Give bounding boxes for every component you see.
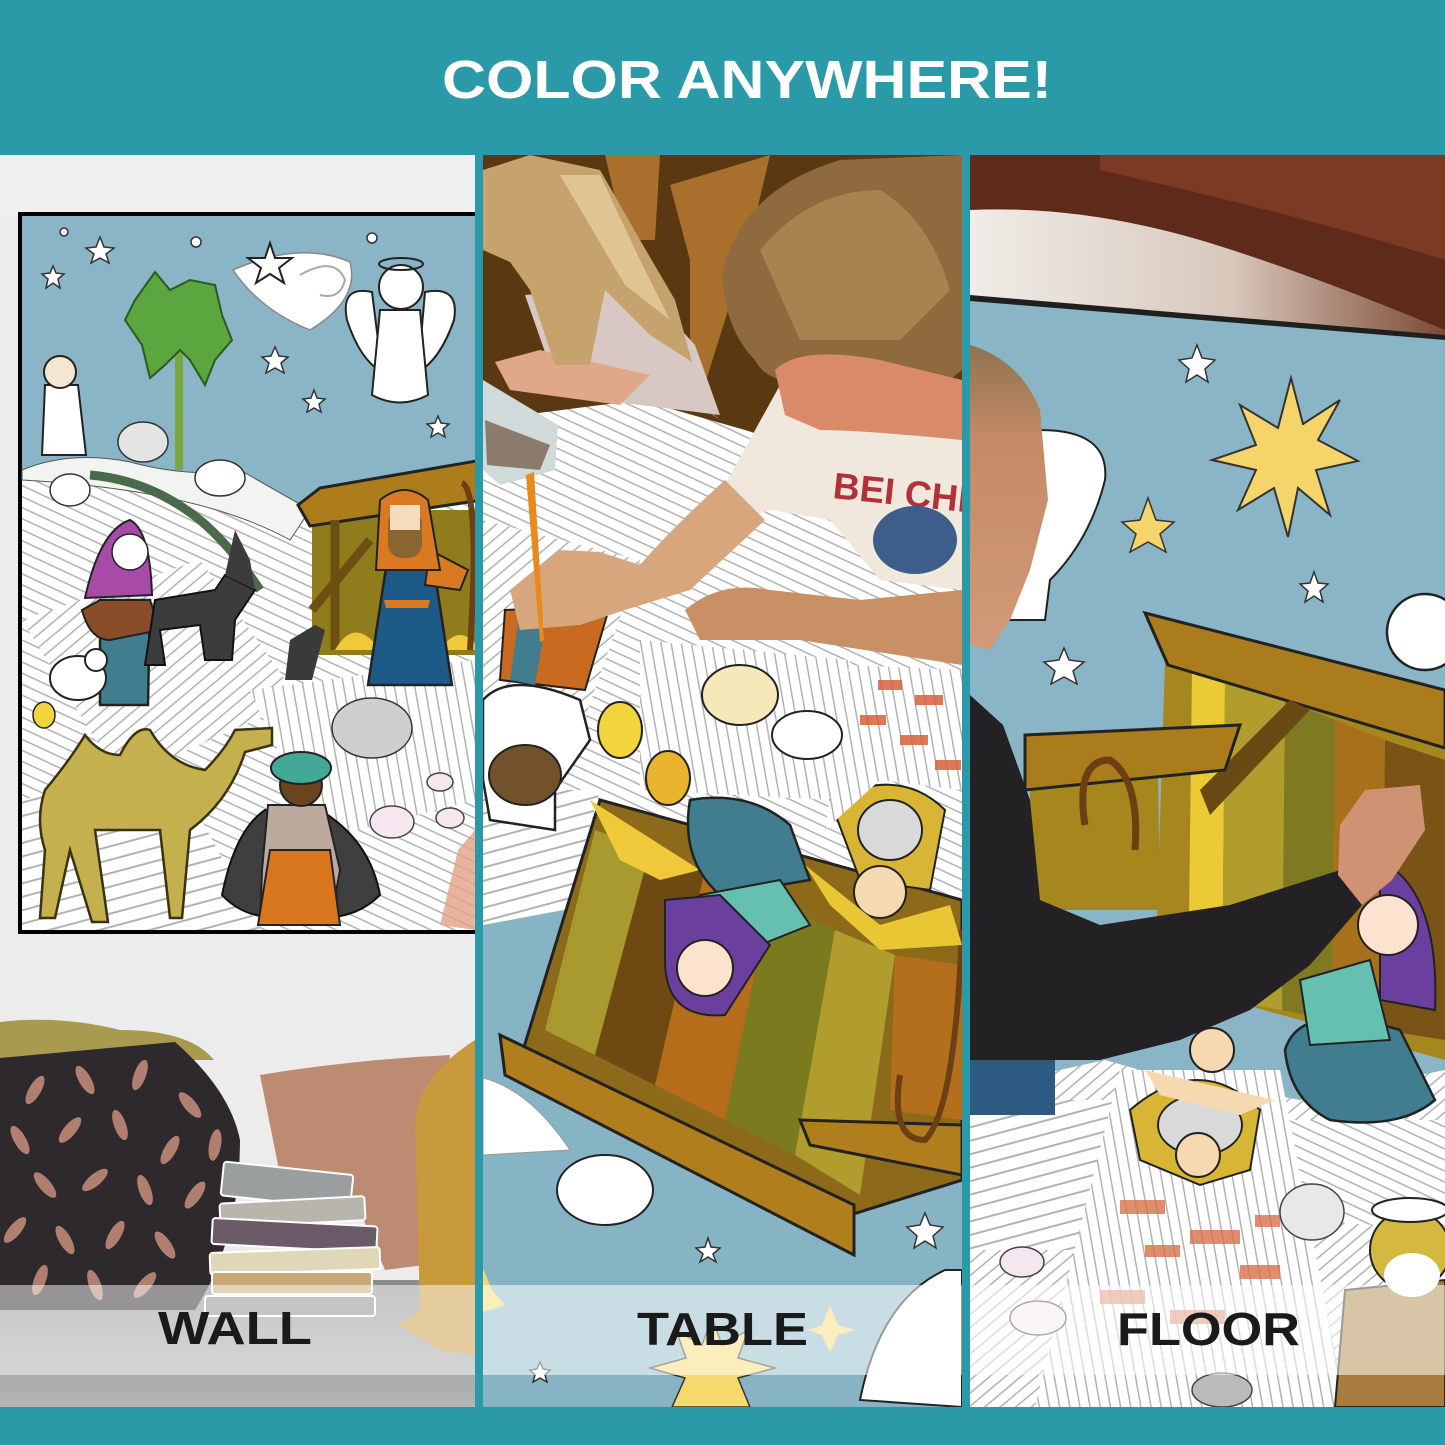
hen and sheep [557, 665, 962, 1407]
sheep and rabbits [1000, 1184, 1344, 1407]
label band: floor [970, 1285, 1445, 1375]
icon: shooting star [233, 243, 352, 330]
basket [0, 1042, 240, 1310]
white stars [1044, 345, 1328, 684]
cat [285, 625, 325, 680]
label: FLOOR: FLOOR [1117, 1303, 1300, 1355]
manger straw and baby [805, 785, 962, 950]
baby in manger [1130, 1028, 1275, 1185]
king [222, 752, 380, 925]
man's head [970, 345, 1048, 650]
boy hair [722, 155, 962, 420]
camel [40, 728, 272, 922]
label: WALL: WALL [158, 1302, 312, 1354]
yellow throw on basket [0, 1020, 214, 1060]
sky [483, 910, 565, 930]
chick [33, 702, 55, 728]
stable upside down [500, 800, 962, 1255]
title: COLOR ANYWHERE! [442, 50, 1052, 110]
hen [1387, 594, 1445, 670]
wood floor [970, 155, 1445, 355]
icon: tree [125, 272, 232, 470]
boy face [775, 354, 962, 440]
label: TABLE: TABLE [637, 1303, 808, 1355]
chicks [598, 702, 690, 805]
blanket fragment [440, 830, 475, 930]
Joseph [368, 483, 474, 685]
stars [530, 1213, 943, 1382]
label band: table [483, 1285, 962, 1375]
small yellow star [1122, 498, 1174, 552]
label band: wall [0, 1285, 475, 1375]
man's hand [1338, 785, 1425, 905]
floor [0, 1280, 475, 1407]
stable [298, 460, 482, 655]
shepherd upside down [483, 605, 610, 830]
panel: wall [0, 155, 488, 1407]
pencil [526, 472, 544, 642]
shepherd corner [1335, 1198, 1445, 1407]
Mary [1285, 860, 1435, 1122]
sheep group [50, 422, 412, 758]
poster on wall [18, 212, 488, 934]
books stack [205, 1162, 380, 1316]
panel: table [483, 155, 962, 1407]
stable [1025, 613, 1445, 1060]
man's arm in black sleeve [970, 695, 1362, 1060]
angel behind head [1000, 430, 1105, 620]
crayon box [483, 380, 558, 485]
boy shirt [722, 385, 962, 590]
poster on table [483, 400, 962, 1407]
hen [50, 649, 107, 700]
boy [510, 155, 1015, 665]
Mary upside down [665, 798, 810, 1015]
shepherd on hill [42, 356, 86, 455]
rabbits [370, 773, 464, 838]
pillow [260, 1055, 450, 1270]
shirt print: BEI CHILL [831, 465, 1015, 525]
icon: angel [346, 258, 455, 402]
blanket with red chevrons [825, 665, 962, 830]
chevron blanket [1035, 1070, 1345, 1407]
boy right arm [685, 588, 962, 665]
poster on floor [970, 295, 1445, 1407]
boy left arm [510, 480, 765, 630]
panel: floor [970, 155, 1445, 1407]
donkey [145, 530, 255, 665]
shepherd feet [970, 1060, 1055, 1115]
ground hatch [970, 1060, 1445, 1407]
girl [483, 155, 720, 415]
wing fragment [483, 1078, 570, 1155]
dining room background [483, 155, 962, 445]
stars [42, 228, 449, 437]
Mary figure [82, 520, 160, 705]
yellow chair [398, 1040, 475, 1355]
big star [1212, 378, 1358, 537]
big yellow star [650, 1318, 775, 1407]
